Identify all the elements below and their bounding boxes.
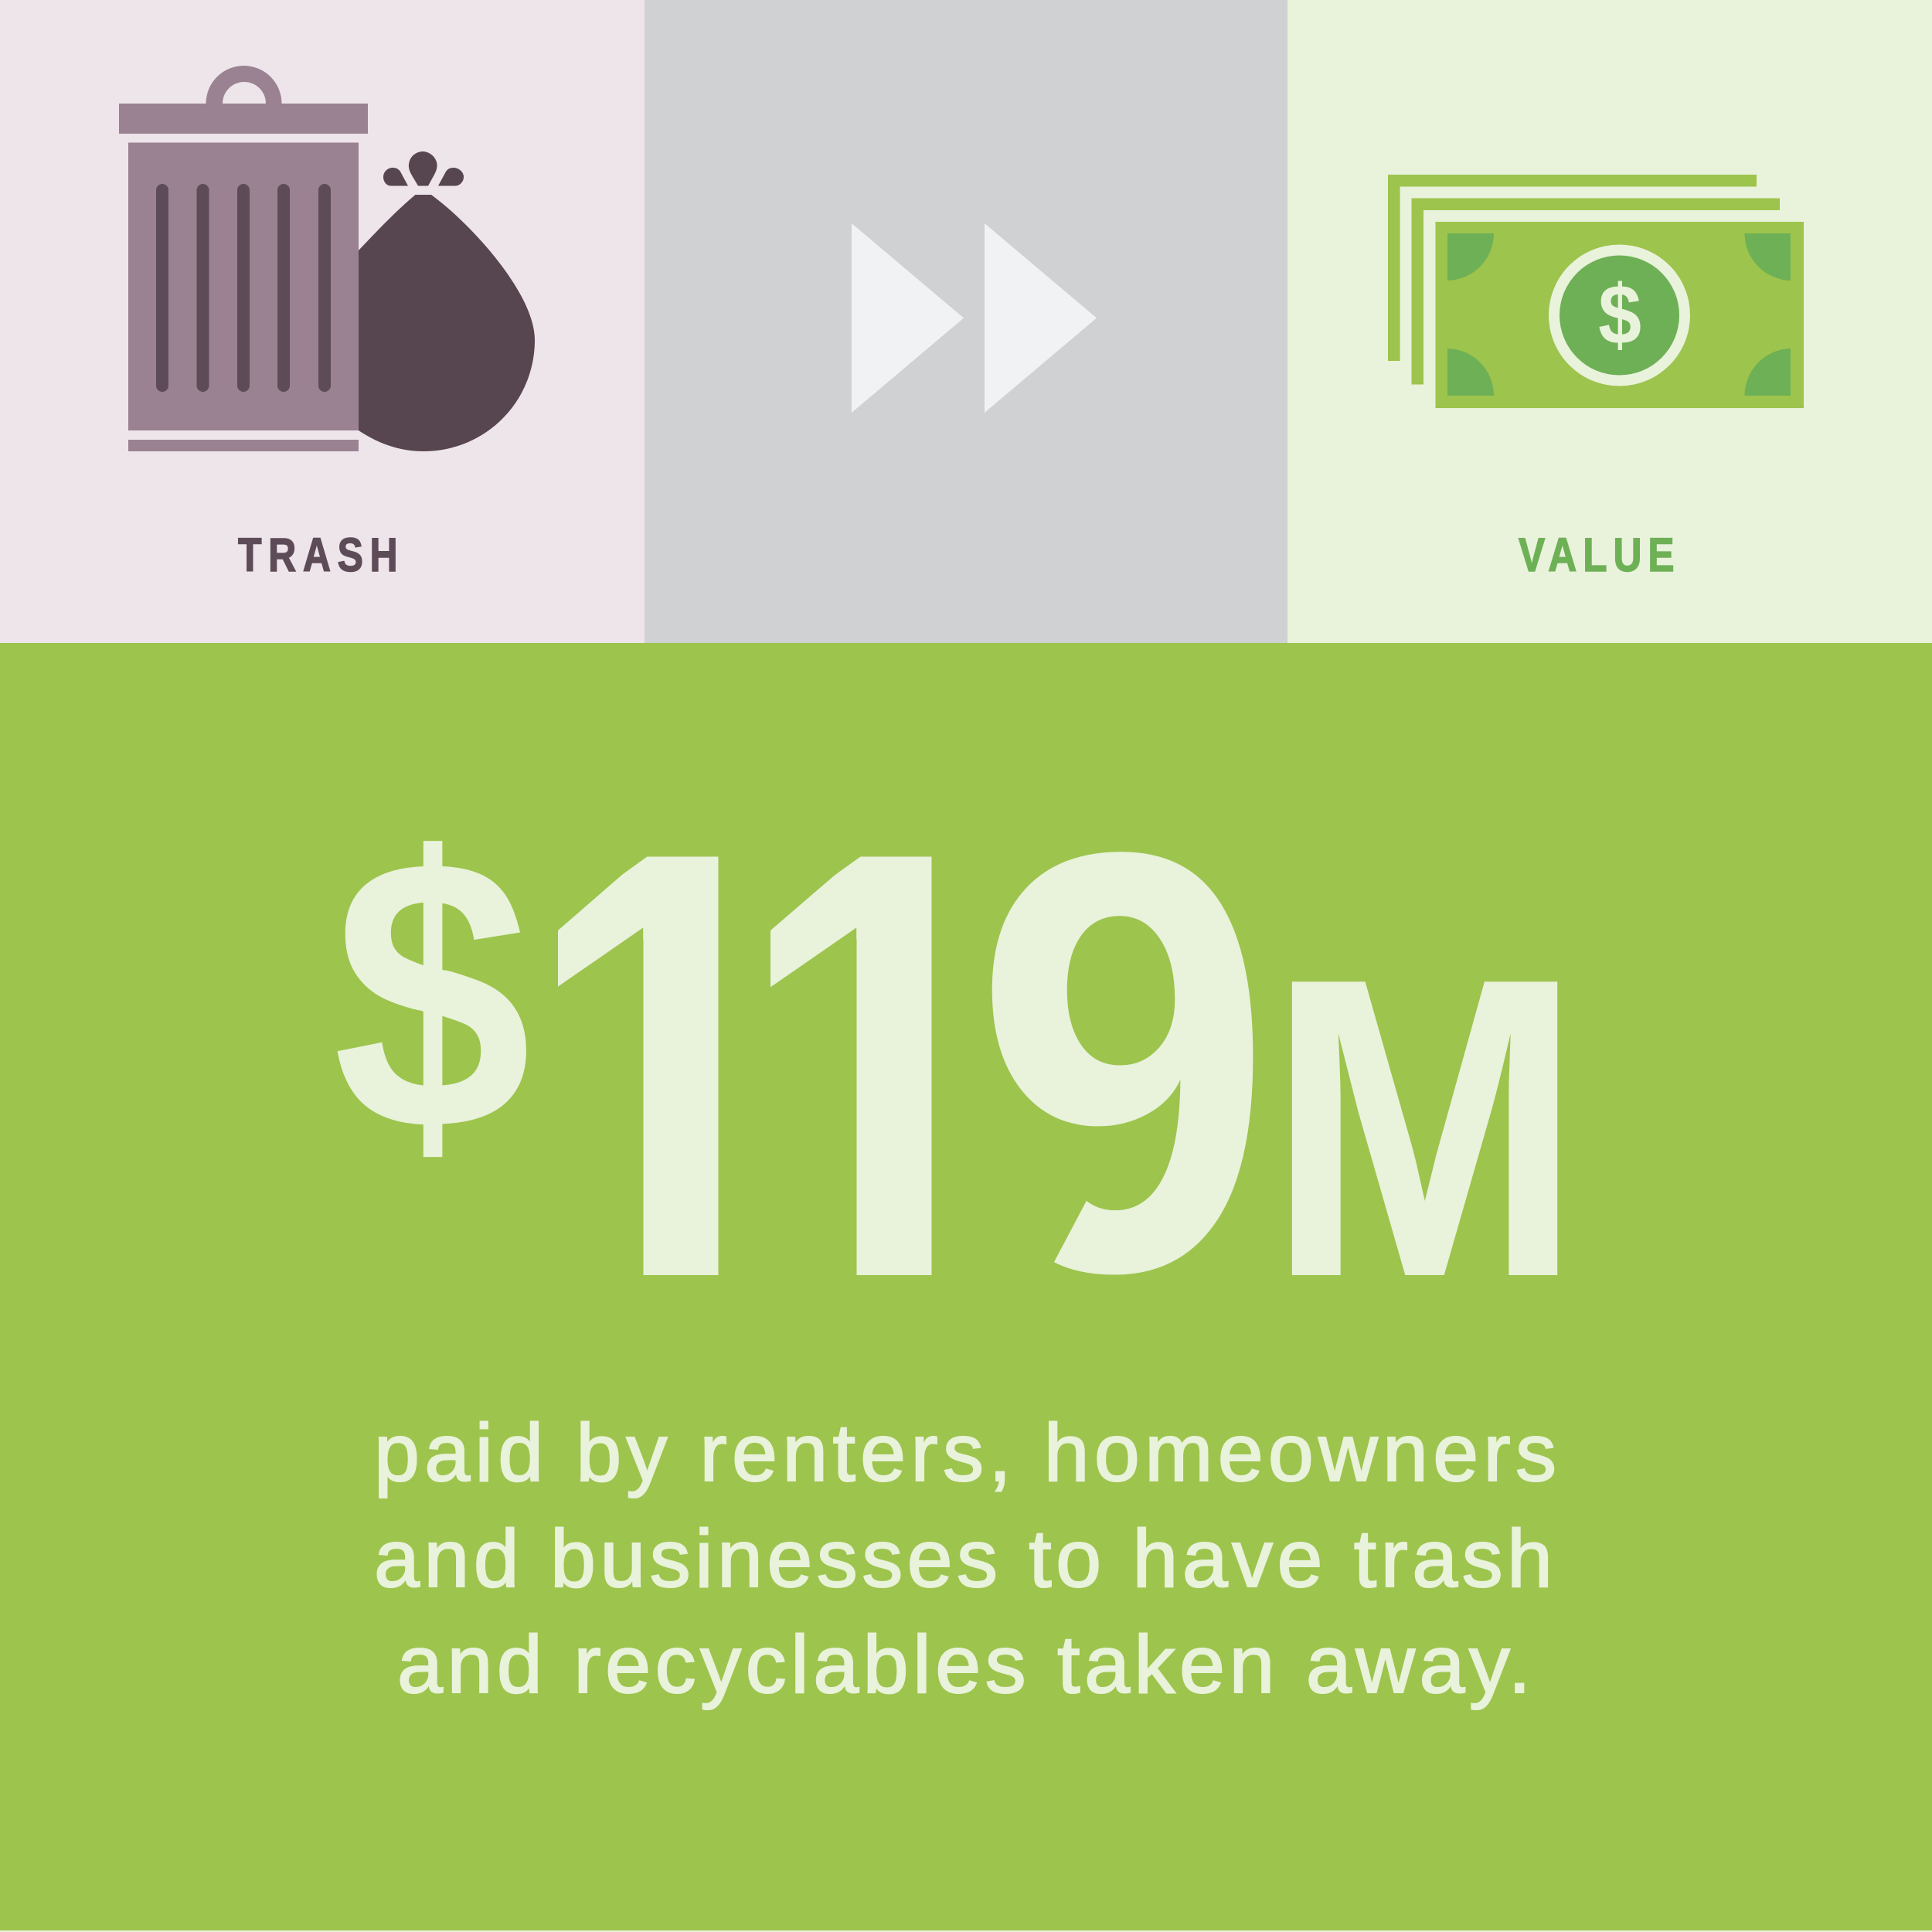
icon: money bills: $ (1598, 268, 1641, 362)
icon: trash can (119, 66, 535, 451)
label: trash: TRASH (238, 529, 398, 581)
big number: $119M: M (1267, 889, 1583, 1366)
label: value: VALUE (1519, 529, 1675, 581)
panel: statistic (0, 841, 1932, 1932)
big number: $119M: 1 (515, 725, 820, 1404)
big number: $119M (337, 841, 1558, 1275)
big number: $119M: 9 (974, 729, 1273, 1396)
panel: value (1287, 0, 1932, 643)
big number: $119M: 1 (728, 725, 1033, 1404)
description: paid by renters, homeowners (374, 1407, 1556, 1498)
panel: arrows (645, 0, 1287, 643)
icon: fast-forward arrows (852, 223, 1097, 413)
description (374, 1407, 1556, 1710)
icon: money bills (1388, 175, 1804, 408)
panel: trash (0, 0, 645, 643)
big number: $119M: $ (332, 779, 531, 1211)
description: and businesses to have trash (374, 1513, 1553, 1604)
description: and recyclables taken away. (397, 1619, 1531, 1710)
